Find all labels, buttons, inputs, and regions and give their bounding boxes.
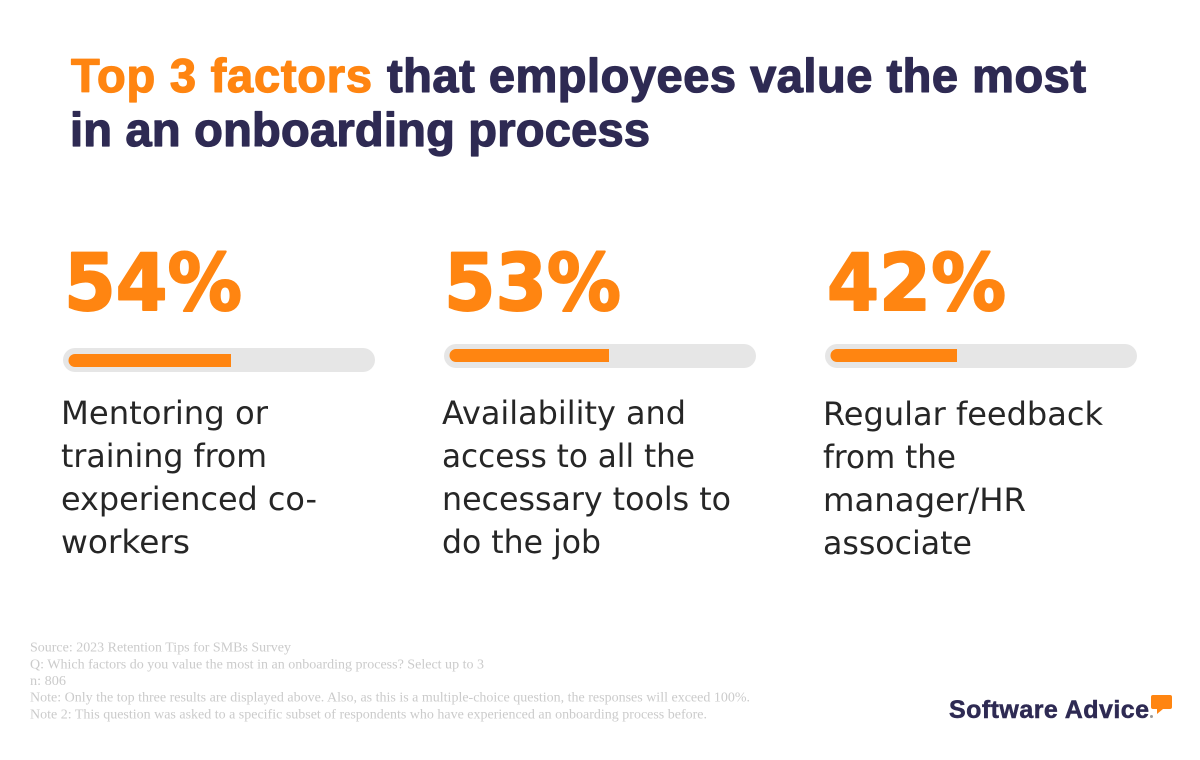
source notes: n: 806 <box>30 673 66 688</box>
description: tools <box>442 394 731 561</box>
description: tools: necessary tools to <box>442 480 731 518</box>
description: feedback: manager/HR <box>823 481 1026 519</box>
progress bar: 54% <box>63 348 375 372</box>
panel: mentoring stat <box>61 239 375 561</box>
title: that employees value the most <box>387 49 1086 102</box>
progress bar: 42% <box>825 344 1137 368</box>
icon: speech bubble <box>1151 695 1172 714</box>
source notes: Q: Which factors do you value the most in an onboarding process? Select up to 3 <box>30 656 484 672</box>
description: feedback: Regular feedback <box>823 395 1103 433</box>
source notes: Source: 2023 Retention Tips for SMBs Survey <box>30 640 291 654</box>
description: feedback <box>823 395 1103 562</box>
description: mentoring <box>61 394 317 561</box>
description: mentoring: Mentoring or <box>61 394 269 432</box>
description: mentoring: training from <box>61 437 267 475</box>
panel: tools stat <box>442 239 756 561</box>
logo dot <box>1150 715 1153 718</box>
source notes <box>30 640 750 722</box>
progress bar: 53% <box>444 344 756 368</box>
panel: feedback stat <box>823 239 1137 562</box>
description: mentoring: experienced co- <box>61 480 317 518</box>
source notes: Note 2: This question was asked to a specific subset of respondents who have experienced an onboarding process before. <box>30 706 707 722</box>
description: feedback: from the <box>823 438 956 476</box>
percentage: 42%: 42% <box>827 239 1006 329</box>
description: tools: access to all the <box>442 437 695 475</box>
source notes: Note: Only the top three results are displayed above. Also, as this is a multiple-choice question, the responses will exceed 100%. <box>30 690 750 704</box>
title <box>70 49 1086 156</box>
description: tools: do the job <box>442 523 601 561</box>
percentage: 53%: 53% <box>444 239 621 329</box>
description: mentoring: workers <box>61 523 190 561</box>
percentage: 54%: 54% <box>64 239 242 329</box>
logo: Software Advice: Software Advice <box>949 696 1149 724</box>
description: tools: Availability and <box>442 394 686 432</box>
title: Top 3 factors <box>71 49 372 102</box>
description: feedback: associate <box>823 524 972 562</box>
title: in an onboarding process <box>70 103 650 156</box>
